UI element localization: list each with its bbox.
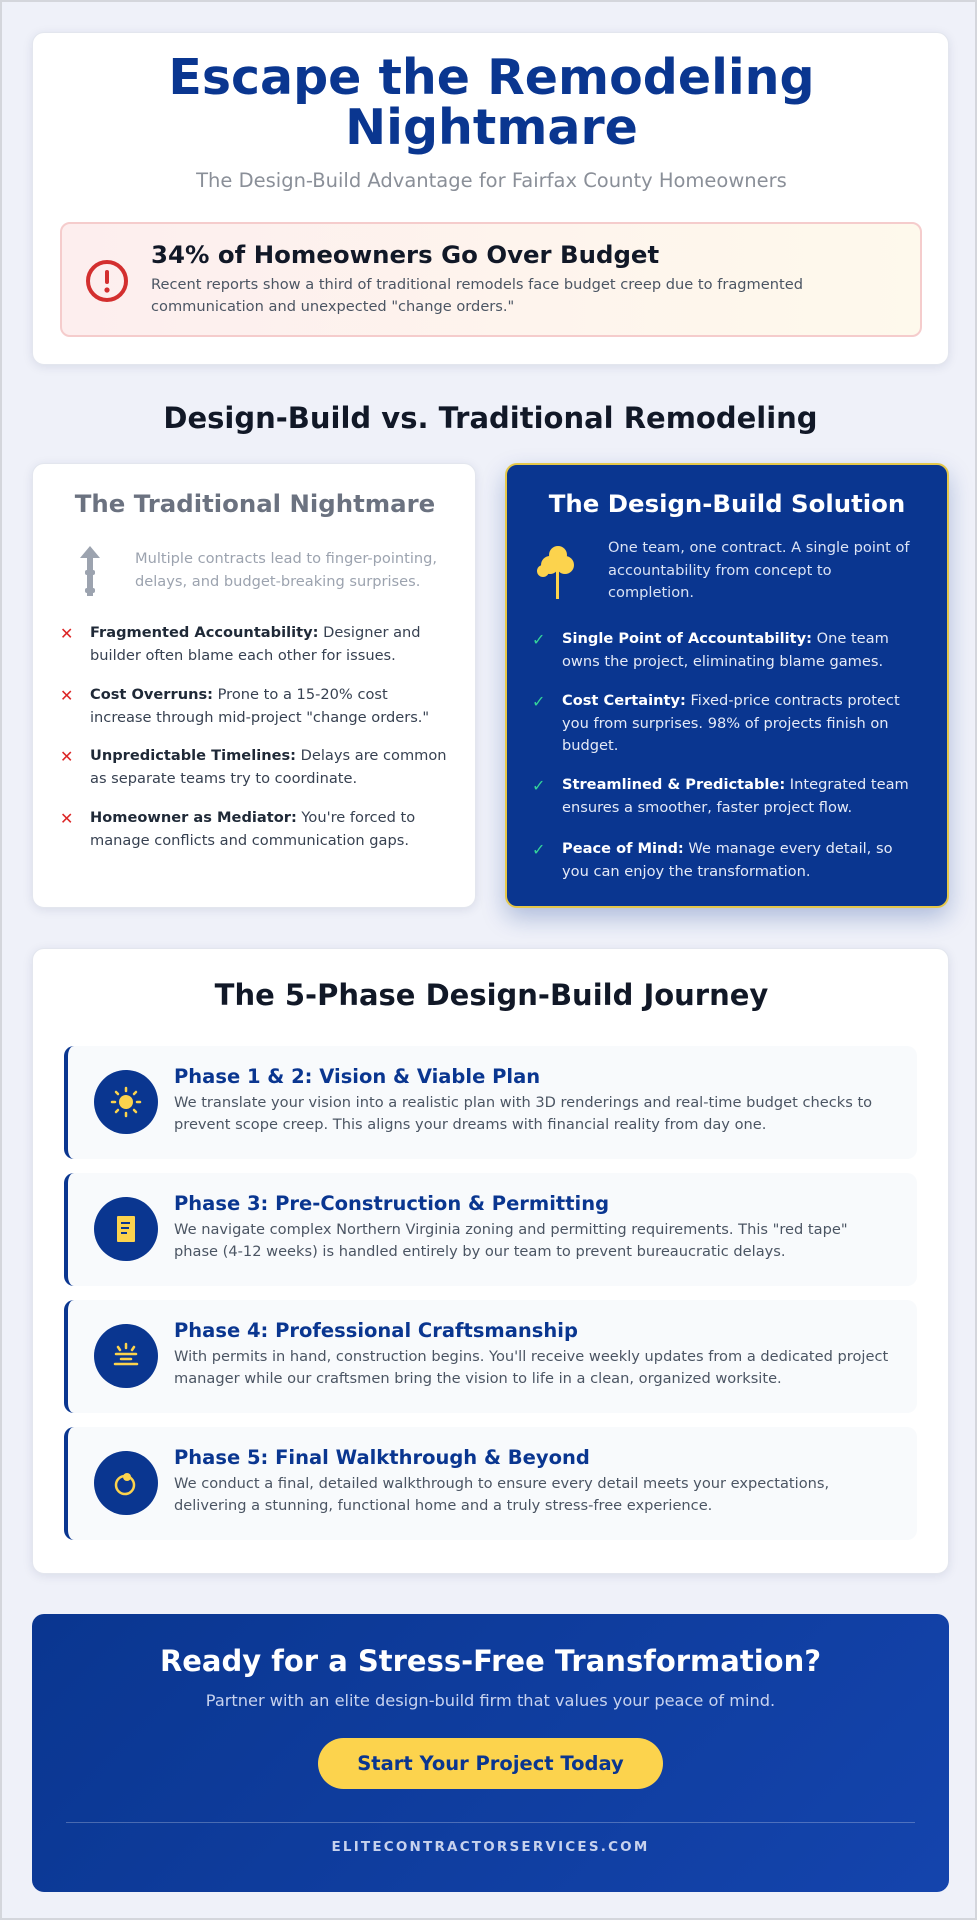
item 3: Streamlined & Predictable: Integrated team: [562, 776, 909, 793]
phase title: Phase 3: Pre-Construction & Permitting: [174, 1192, 609, 1215]
item 3: ensures a smoother, faster project flow.: [562, 798, 852, 816]
intro text: Multiple contracts lead to finger-pointing,: [135, 550, 437, 567]
phase text: We navigate complex Northern Virginia zoning and permitting requirements. This "red tape": [174, 1221, 848, 1238]
panel: traditional nightmare: [32, 463, 476, 908]
cta panel: [32, 1614, 949, 1892]
panel: traditional nightmare: ✕: [60, 624, 73, 643]
phase 5: [64, 1427, 917, 1540]
phase text: [174, 1348, 888, 1387]
item 1: Fragmented Accountability: Designer and: [90, 624, 421, 641]
intro text: delays, and budget-breaking surprises.: [135, 572, 420, 590]
phase text: With permits in hand, construction begins. You'll receive weekly updates from a dedicated project: [174, 1348, 888, 1365]
panel: design-build solution: ✓: [532, 840, 545, 859]
alert heading: 34% of Homeowners Go Over Budget: [151, 240, 659, 269]
icon: warning: [86, 260, 128, 302]
section heading: Design-Build vs. Traditional Remodeling: [163, 401, 818, 435]
item 2: budget.: [562, 737, 618, 754]
item 2: increase through mid-project "change orders.": [90, 708, 429, 726]
phase text: [174, 1094, 872, 1133]
intro text: completion.: [608, 584, 694, 601]
icon: tree: [537, 546, 574, 599]
item 2: Cost Overruns: Prone to a 15-20% cost: [90, 686, 388, 703]
item 4: [60, 809, 415, 848]
header card: [32, 32, 949, 365]
item 2: [60, 686, 429, 726]
item 4: manage conflicts and communication gaps.: [90, 832, 409, 848]
item 4: Peace of Mind: We manage every detail, so: [562, 840, 892, 857]
item 3: [532, 776, 909, 816]
item 2: [532, 692, 900, 754]
phase 4: [64, 1300, 917, 1413]
intro text: [608, 539, 910, 601]
icon: sun: [94, 1070, 158, 1134]
item 2: Cost Certainty: Fixed-price contracts protect: [562, 692, 900, 709]
panel: traditional nightmare: ✕: [60, 686, 73, 705]
alert text: Recent reports show a third of traditional remodels face budget creep due to fragmented: [151, 276, 803, 293]
alert callout: [60, 222, 922, 337]
footer url: ELITECONTRACTORSERVICES.COM: [331, 1839, 650, 1855]
item 2: you from surprises. 98% of projects finish on: [562, 714, 889, 732]
item 4: you can enjoy the transformation.: [562, 862, 810, 880]
list: [532, 630, 909, 880]
subtitle: The Design-Build Advantage for Fairfax County Homeowners: [196, 169, 787, 192]
phase text: We conduct a final, detailed walkthrough to ensure every detail meets your expectations,: [174, 1475, 829, 1492]
cta text: Partner with an elite design-build firm that values your peace of mind.: [206, 1691, 775, 1710]
phase text: We translate your vision into a realistic plan with 3D renderings and real-time budget checks to: [174, 1094, 872, 1111]
item 1: builder often blame each other for issues.: [90, 646, 396, 664]
intro text: [135, 550, 437, 590]
item 3: Unpredictable Timelines: Delays are common: [90, 747, 447, 764]
list: [60, 624, 447, 848]
phase 3: [64, 1173, 917, 1286]
phase text: delivering a stunning, functional home and a truly stress-free experience.: [174, 1497, 712, 1514]
title: [168, 49, 815, 156]
phase text: phase (4-12 weeks) is handled entirely by our team to prevent bureaucratic delays.: [174, 1243, 786, 1260]
phase title: Phase 4: Professional Craftsmanship: [174, 1319, 578, 1342]
panel: design-build solution: ✓: [532, 776, 545, 795]
item 1: owns the project, eliminating blame games.: [562, 652, 883, 670]
panel: traditional nightmare: ✕: [60, 809, 73, 828]
panel heading: The Design-Build Solution: [549, 489, 905, 518]
journey heading: The 5-Phase Design-Build Journey: [215, 978, 768, 1012]
panel: journey: [32, 948, 949, 1574]
icon: ring: [94, 1451, 158, 1515]
alert text: [151, 276, 803, 315]
icon: arrows: [80, 546, 100, 596]
item 4: Homeowner as Mediator: You're forced to: [90, 809, 415, 826]
cta heading: Ready for a Stress-Free Transformation?: [160, 1644, 821, 1678]
item 4: [532, 840, 892, 880]
phase text: [174, 1221, 848, 1260]
intro text: One team, one contract. A single point of: [608, 539, 910, 556]
phase 1-2: [64, 1046, 917, 1159]
panel: design-build solution: [505, 463, 949, 908]
phase text: manager while our craftsmen bring the vision to life in a clean, organized worksite.: [174, 1370, 782, 1387]
icon: document: [94, 1197, 158, 1261]
phase text: [174, 1475, 829, 1514]
item 3: [60, 747, 447, 786]
intro text: accountability from concept to: [608, 562, 832, 578]
icon: sunrise: [94, 1324, 158, 1388]
phase text: prevent scope creep. This aligns your dreams with financial reality from day one.: [174, 1116, 766, 1133]
item 3: as separate teams try to coordinate.: [90, 770, 357, 786]
panel: design-build solution: ✓: [532, 630, 545, 649]
cta button: Start Your Project Today: [357, 1752, 624, 1775]
phase title: Phase 1 & 2: Vision & Viable Plan: [174, 1065, 540, 1088]
item 1: Single Point of Accountability: One team: [562, 630, 889, 647]
cta button: [318, 1738, 663, 1789]
alert text: communication and unexpected "change orders.": [151, 298, 514, 315]
panel: design-build solution: ✓: [532, 692, 545, 711]
title: Escape the Remodeling: [168, 49, 815, 106]
panel: traditional nightmare: ✕: [60, 747, 73, 766]
phase title: Phase 5: Final Walkthrough & Beyond: [174, 1446, 590, 1469]
item 1: [60, 624, 421, 664]
item 1: [532, 630, 889, 670]
title: Nightmare: [345, 99, 638, 156]
panel heading: The Traditional Nightmare: [75, 489, 435, 518]
